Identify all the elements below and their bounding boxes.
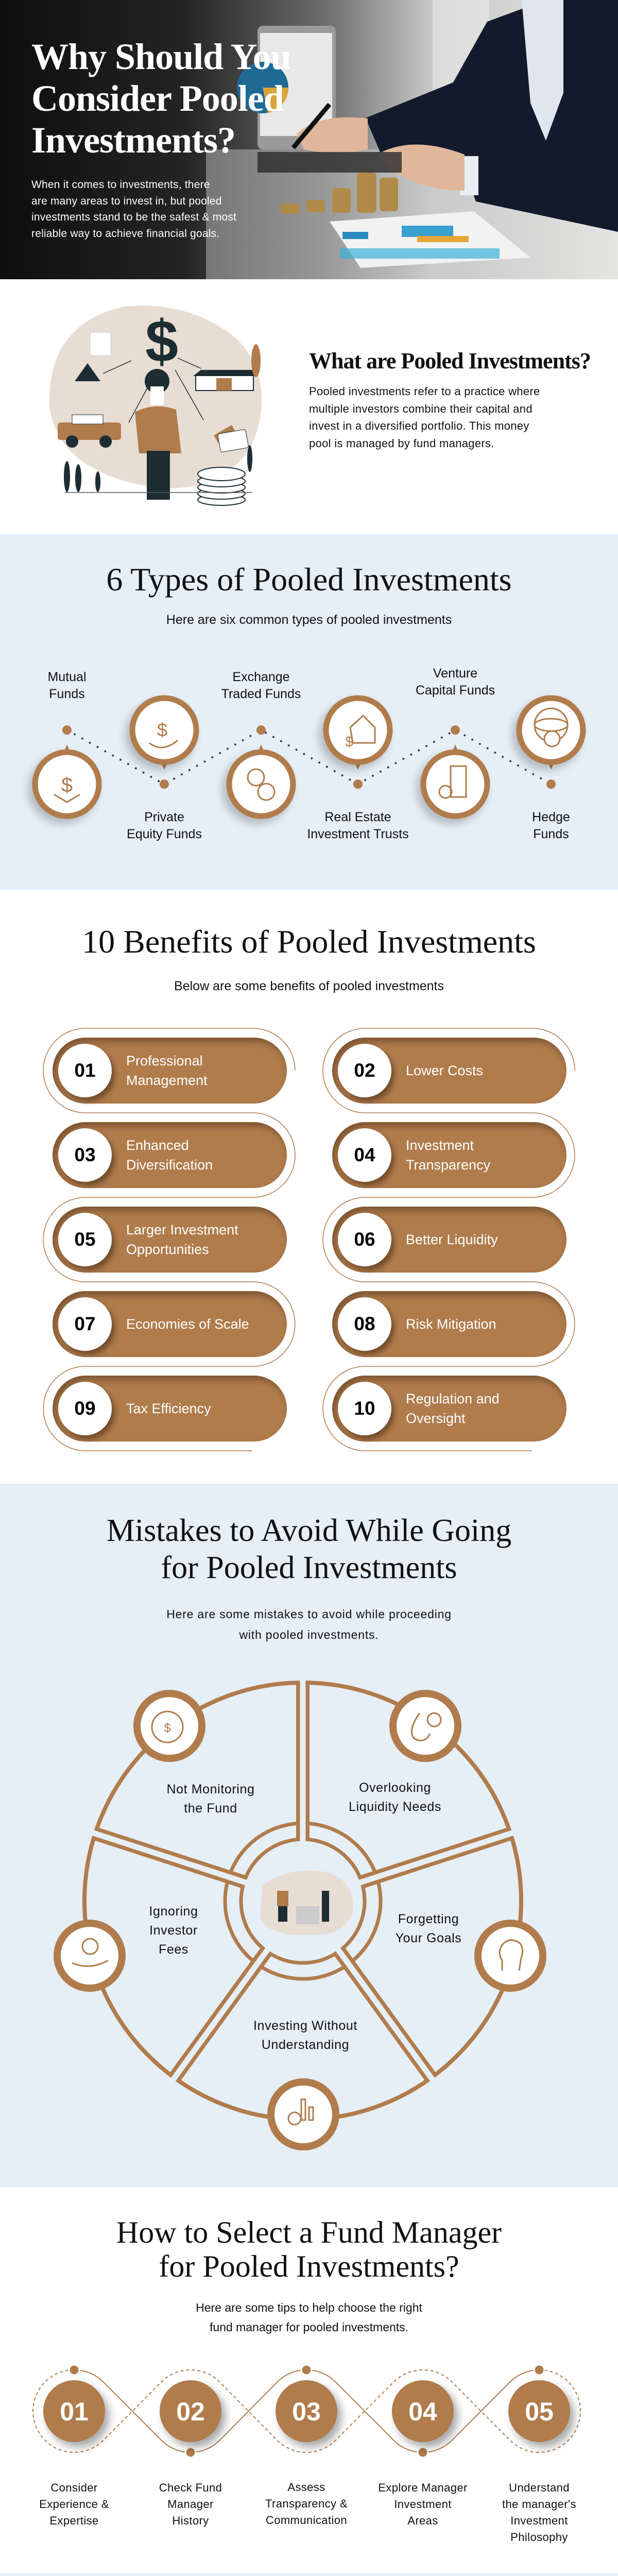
label: overlooking liquidity needs <box>349 1781 441 1814</box>
label: step 4 <box>378 2481 468 2527</box>
benefit 06: 06 <box>354 1229 375 1250</box>
label: step 3 <box>265 2481 348 2527</box>
icon: venture capital <box>423 752 487 816</box>
icon: real estate: $ <box>345 734 353 750</box>
benefit 07: Economies of Scale <box>126 1316 249 1332</box>
subtitle: Here are six common types of pooled investments <box>166 613 452 627</box>
label: ignoring investor fees: Ignoring <box>149 1904 198 1919</box>
label: overlooking liquidity needs: Overlooking <box>359 1781 431 1795</box>
icon: mutual funds: $ <box>61 774 73 796</box>
label: hedge funds <box>532 810 570 841</box>
label: step 5: Investment <box>510 2514 568 2527</box>
label: hedge funds: Funds <box>533 827 569 841</box>
label: real estate investment trusts <box>307 810 409 841</box>
label: step 5: Philosophy <box>510 2531 568 2544</box>
benefit 10: Regulation and <box>406 1391 500 1406</box>
icon: private equity: $ <box>157 719 167 740</box>
step 01 <box>43 2380 105 2442</box>
benefit 03 <box>53 1122 287 1188</box>
label: forgetting your goals: Forgetting <box>398 1912 459 1926</box>
benefit 08: Risk Mitigation <box>406 1316 496 1332</box>
hero intro text: reliable way to achieve financial goals. <box>31 228 219 239</box>
label: exchange traded funds: Traded Funds <box>221 687 301 701</box>
benefit 04: 04 <box>354 1144 375 1165</box>
benefit 10 <box>332 1376 566 1442</box>
heading: mistakes: Mistakes to Avoid While Going <box>107 1513 511 1548</box>
label: investing without understanding: Understanding <box>262 2038 349 2052</box>
benefit 10: Oversight <box>406 1411 466 1426</box>
label: real estate investment trusts: Real Estate <box>324 810 391 824</box>
benefit 01 <box>53 1038 287 1104</box>
subtitle: fund manager <box>196 2301 422 2334</box>
benefit 01: Management <box>126 1073 208 1088</box>
subtitle: fund manager: Here are some tips to help choose the right <box>196 2301 422 2314</box>
subtitle: mistakes: Here are some mistakes to avoid while proceeding <box>166 1607 452 1621</box>
benefit 03: Diversification <box>126 1157 213 1173</box>
benefit 06 <box>332 1207 566 1273</box>
hero title <box>31 36 291 161</box>
label: not monitoring the fund: the Fund <box>184 1801 237 1816</box>
icon: not monitoring: $ <box>164 1721 171 1735</box>
icon: exchange traded <box>229 752 293 816</box>
hero intro text <box>31 179 236 239</box>
label: investing without understanding: Investing Without <box>253 2019 357 2033</box>
heading: mistakes <box>107 1513 511 1585</box>
label: step 1: Experience & <box>39 2498 109 2511</box>
label: mutual funds: Mutual <box>47 670 87 684</box>
snake outlines <box>43 1028 575 1451</box>
label: step 1: Consider <box>50 2481 98 2494</box>
label: step 3: Assess <box>287 2481 325 2494</box>
label: step 2: History <box>172 2514 209 2527</box>
benefit 03: Enhanced <box>126 1138 189 1153</box>
benefit 01: Professional <box>126 1053 203 1069</box>
panel: conclusion <box>0 2573 618 2576</box>
label: step 4: Investment <box>394 2498 452 2511</box>
benefit 07 <box>53 1291 287 1357</box>
benefit 04 <box>332 1122 566 1188</box>
hero intro text: When it comes to investments, there <box>31 179 210 191</box>
label: venture capital funds <box>416 666 495 698</box>
benefit 04: Transparency <box>406 1157 490 1173</box>
text: definition <box>309 385 540 450</box>
benefit 05: Larger Investment <box>126 1222 238 1238</box>
benefit 04: Investment <box>406 1138 474 1153</box>
subtitle: benefits: Below are some benefits of pooled investments <box>174 979 444 993</box>
label: step 2: Check Fund <box>159 2481 222 2494</box>
icon: investor fees <box>57 1923 122 1988</box>
benefit 02 <box>332 1038 566 1104</box>
zigzag timeline <box>24 696 586 828</box>
label: exchange traded funds: Exchange <box>232 670 290 684</box>
text: definition: pool is managed by fund managers. <box>309 437 494 450</box>
label: venture capital funds: Capital Funds <box>416 683 495 698</box>
label: step 3: Transparency & <box>265 2497 348 2510</box>
label: step 4: Areas <box>407 2514 438 2527</box>
step 05: 05 <box>525 2397 554 2426</box>
benefit 02: Lower Costs <box>406 1063 483 1078</box>
center illustration <box>260 1871 353 1935</box>
step 05 <box>508 2380 570 2442</box>
label: overlooking liquidity needs: Liquidity Needs <box>349 1800 441 1814</box>
benefit 01: 01 <box>74 1060 96 1081</box>
text: definition: invest in a diversified portfolio. This money <box>309 419 529 432</box>
step 04: 04 <box>408 2397 437 2426</box>
benefit 07: 07 <box>74 1313 96 1334</box>
heading: select fund manager <box>116 2215 502 2283</box>
label: step 1: Expertise <box>49 2514 99 2527</box>
label: step 3: Communication <box>266 2514 347 2527</box>
benefit 09 <box>53 1376 287 1442</box>
label: investing without understanding <box>253 2019 357 2052</box>
benefit 06: Better Liquidity <box>406 1232 498 1247</box>
label: venture capital funds: Venture <box>433 666 477 681</box>
hero intro text: are many areas to invest in, but pooled <box>31 195 222 207</box>
hero title: Consider Pooled <box>31 78 284 119</box>
icon: private equity <box>132 698 196 762</box>
icon: hedge funds <box>519 698 583 762</box>
benefit 03: 03 <box>74 1144 96 1165</box>
icon: not monitoring <box>137 1693 202 1758</box>
label: ignoring investor fees: Investor <box>149 1923 198 1938</box>
label: real estate investment trusts: Investment Trusts <box>307 827 409 841</box>
label: mutual funds: Funds <box>49 687 85 701</box>
label: step 5: the manager's <box>502 2498 576 2511</box>
label: step 1 <box>39 2481 109 2527</box>
label: step 5: Understand <box>509 2481 570 2494</box>
hero photo illustration <box>206 0 618 279</box>
benefit 02: 02 <box>354 1060 375 1081</box>
fund manager steps wave <box>32 2366 581 2456</box>
benefit 08: 08 <box>354 1313 375 1334</box>
heading: 10 benefits: 10 Benefits of Pooled Investments <box>82 923 536 960</box>
step 02: 02 <box>176 2397 205 2426</box>
panel: mistakes <box>0 1484 618 2188</box>
subtitle: mistakes: with pooled investments. <box>239 1628 379 1641</box>
label: forgetting your goals <box>396 1912 461 1945</box>
hero title: Why Should You <box>31 36 291 77</box>
heading: mistakes: for Pooled Investments <box>161 1550 457 1585</box>
benefit 09: 09 <box>74 1398 96 1419</box>
benefit 05: Opportunities <box>126 1242 209 1257</box>
label: not monitoring the fund: Not Monitoring <box>167 1782 254 1797</box>
label: forgetting your goals: Your Goals <box>396 1931 461 1945</box>
step 04 <box>392 2380 454 2442</box>
illustration: person with investments <box>49 306 262 506</box>
text: definition: Pooled investments refer to a practice where <box>309 385 540 398</box>
hero banner <box>0 0 618 279</box>
step 03: 03 <box>292 2397 321 2426</box>
step 02 <box>160 2380 221 2442</box>
step 03 <box>276 2380 337 2442</box>
icon: real estate <box>326 698 390 762</box>
text: definition: multiple investors combine their capital and <box>309 402 533 415</box>
heading: 6 types: 6 Types of Pooled Investments <box>106 561 512 598</box>
label: private equity funds: Equity Funds <box>127 827 202 841</box>
heading: select fund manager: for Pooled Investments? <box>159 2249 459 2283</box>
label: ignoring investor fees <box>149 1904 198 1957</box>
benefit 05 <box>53 1207 287 1273</box>
benefit 05: 05 <box>74 1229 96 1250</box>
label: mutual funds <box>47 670 87 701</box>
panel: 6 types <box>0 534 618 890</box>
heading: what are pooled investments: What are Pooled Investments? <box>309 348 591 374</box>
subtitle: fund manager: fund manager for pooled investments. <box>210 2320 408 2334</box>
icon: mutual funds <box>35 752 99 816</box>
label: step 2: Manager <box>167 2498 214 2511</box>
hero intro text: investments stand to be the safest & most <box>31 211 236 223</box>
benefit 09: Tax Efficiency <box>126 1401 211 1416</box>
label: hedge funds: Hedge <box>532 810 570 824</box>
heading: select fund manager: How to Select a Fund Manager <box>116 2215 502 2249</box>
icon: without understanding <box>271 2082 336 2147</box>
subtitle: mistakes <box>166 1607 452 1641</box>
hero title: Investments? <box>31 120 235 161</box>
label: exchange traded funds <box>221 670 301 701</box>
benefit 10: 10 <box>354 1398 375 1419</box>
step 01: 01 <box>60 2397 89 2426</box>
label: step 5 <box>502 2481 576 2544</box>
label: ignoring investor fees: Fees <box>159 1942 188 1957</box>
benefit 08 <box>332 1291 566 1357</box>
label: not monitoring the fund <box>167 1782 254 1816</box>
wheel diagram <box>54 1681 546 2150</box>
illustration: person with investments: $ <box>145 309 178 375</box>
icon: goals <box>478 1923 543 1988</box>
icon: liquidity <box>393 1693 458 1758</box>
label: step 2 <box>159 2481 222 2527</box>
label: private equity funds <box>127 810 202 841</box>
label: private equity funds: Private <box>144 810 184 824</box>
label: step 4: Explore Manager <box>378 2481 468 2494</box>
